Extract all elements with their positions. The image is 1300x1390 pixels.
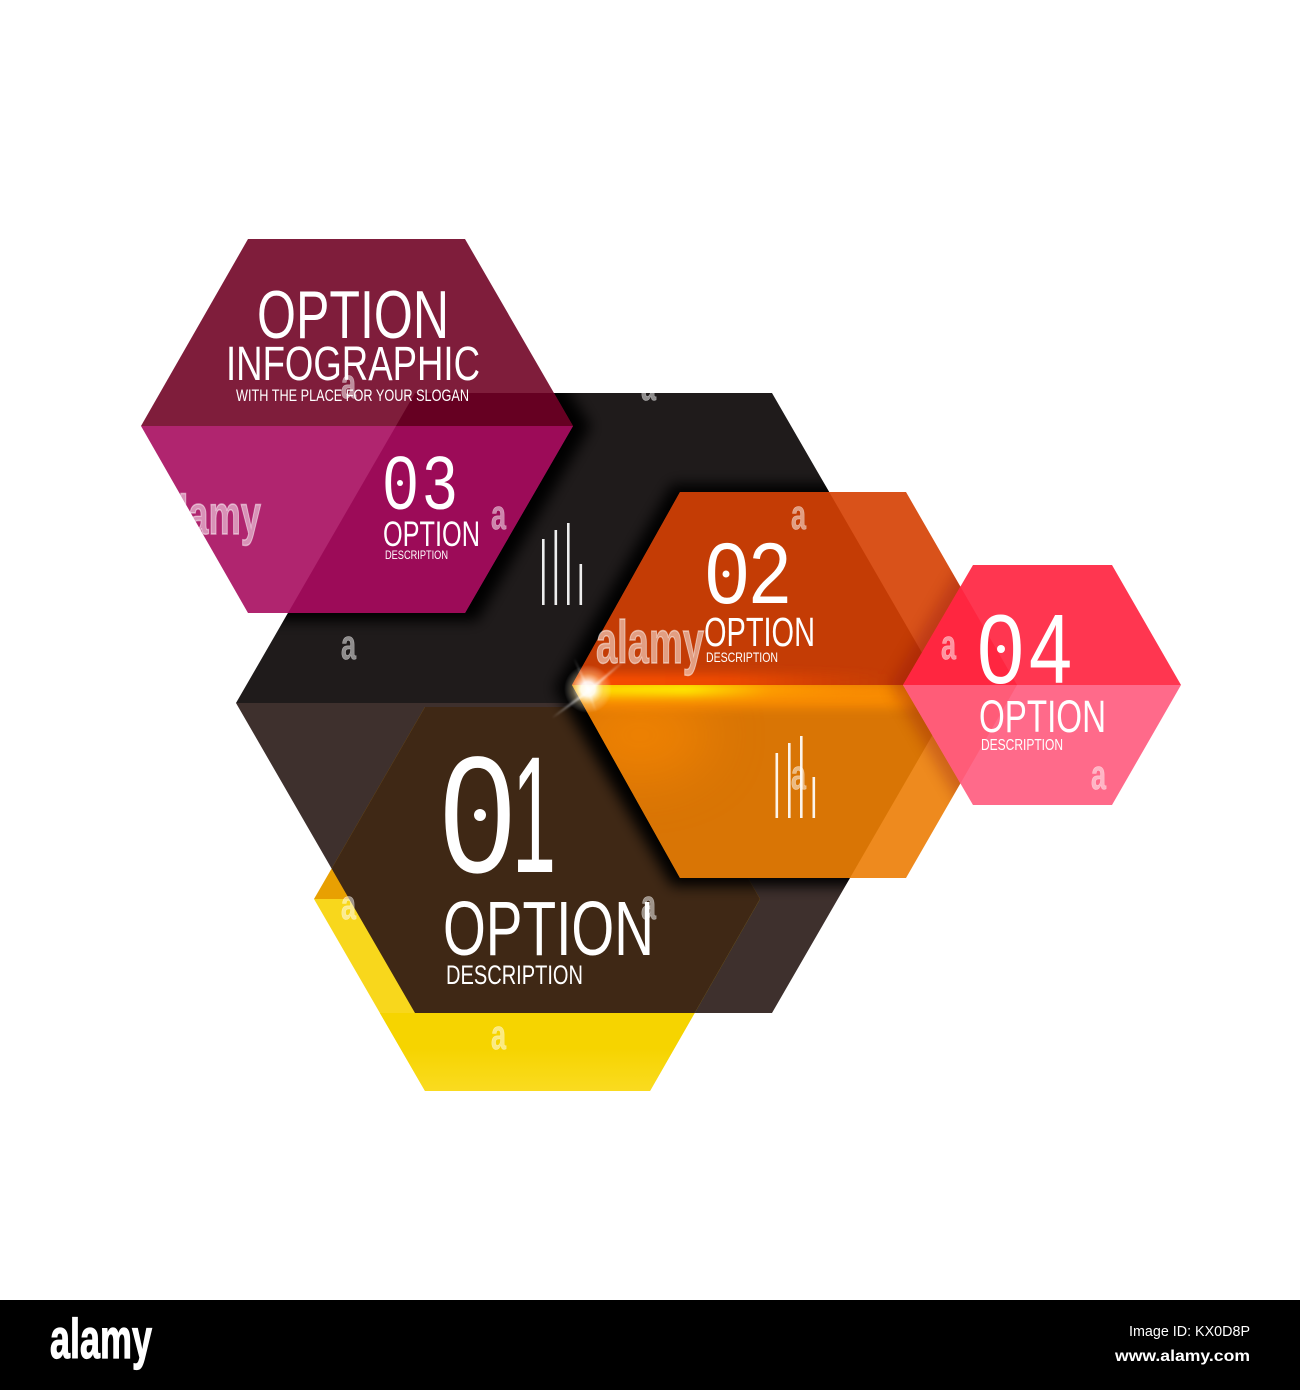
label: option 04 [977, 594, 1106, 754]
hexagon: central black [236, 393, 951, 1013]
hexagon: orange option 02 [572, 492, 960, 878]
heading: option infographic [226, 277, 480, 405]
watermark: alamy stamps [158, 360, 1106, 1058]
label: option 02: OPTION [704, 609, 815, 655]
watermark: alamy stamps: a [641, 362, 656, 409]
heading: option infographic: WITH THE PLACE FOR YOUR SLOGAN [236, 386, 469, 405]
watermark: alamy stamps: a [491, 491, 506, 538]
heading: option infographic: INFOGRAPHIC [226, 338, 480, 391]
label: option 04: OPTION [979, 691, 1106, 742]
label: option 04: 0 [977, 594, 1024, 704]
label: option 02: 0 [705, 526, 749, 622]
watermark: alamy stamps: alamy [596, 609, 704, 676]
icon: bars on black hexagon [542, 523, 582, 605]
label: option 01: 0 [440, 723, 515, 908]
watermark: alamy stamps: a [341, 621, 356, 668]
drop shadows on central hexagon [153, 247, 1009, 886]
watermark: alamy stamps: alamy [158, 483, 261, 546]
watermark: alamy stamps: a [1091, 751, 1106, 798]
label: option 02 [704, 526, 815, 665]
hexagon: purple option 03 [141, 239, 573, 613]
watermark: alamy stamps: a [341, 360, 356, 407]
label: option 01: 1 [512, 723, 556, 908]
watermark: alamy stamps: a [791, 491, 806, 538]
label: option 03 [383, 441, 480, 562]
label: option 02: 2 [749, 526, 791, 622]
label: option 01: OPTION [443, 886, 654, 972]
label: option 01 [440, 723, 654, 990]
label: option 04: 4 [1029, 594, 1072, 704]
hexagon: pink option 04 [890, 557, 1189, 813]
lens flare [552, 658, 625, 718]
footer bar [0, 1300, 1300, 1390]
heading: option infographic: OPTION [257, 277, 449, 353]
label: option 03: 0 [383, 441, 418, 525]
label: option 03: DESCRIPTION [385, 548, 448, 562]
footer website: www.alamy.com [1114, 1348, 1250, 1365]
watermark: alamy stamps: a [791, 751, 806, 798]
hexagon: yellow option 01 [300, 707, 780, 1091]
footer logo: alamy [50, 1307, 152, 1370]
label: option 03: OPTION [383, 515, 480, 554]
label: option 02: DESCRIPTION [706, 649, 778, 665]
watermark: alamy stamps: a [491, 1011, 506, 1058]
watermark: alamy stamps: a [941, 621, 956, 668]
watermark: alamy stamps: a [641, 881, 656, 928]
icon: bars on orange hexagon [776, 736, 815, 818]
watermark: alamy stamps: a [341, 881, 356, 928]
footer image id: Image ID: KX0D8P [1129, 1323, 1250, 1340]
label: option 01: DESCRIPTION [446, 960, 583, 990]
label: option 03: 3 [423, 441, 457, 525]
label: option 04: DESCRIPTION [981, 737, 1063, 754]
